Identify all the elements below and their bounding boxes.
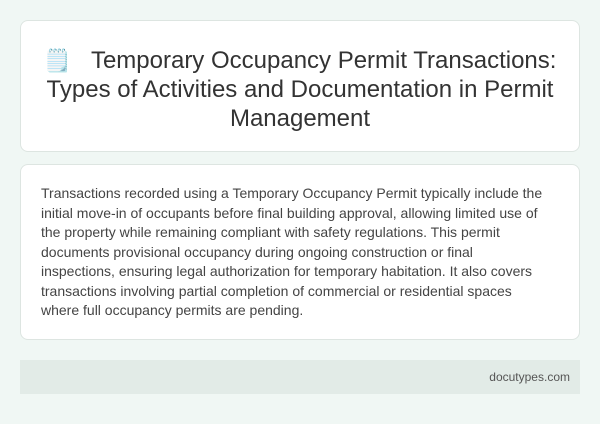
title panel — [20, 20, 580, 152]
description text: where full occupancy permits are pending. — [41, 302, 303, 318]
footer source: docutypes.com — [489, 370, 570, 384]
footer bar — [20, 360, 580, 394]
description text: inspections, ensuring legal authorization for temporary habitation. It also covers — [41, 263, 532, 279]
description panel — [20, 164, 580, 340]
description text: documents provisional occupancy during ongoing construction or final — [41, 244, 473, 260]
description text: transactions involving partial completion of commercial or residential spaces — [41, 282, 512, 298]
title: 🗒️ Temporary Occupancy Permit Transactions: Types of Activities and Documentation in Permit Management — [44, 47, 556, 132]
description text — [41, 185, 542, 318]
description text: the property while remaining compliant with safety regulations. This permit — [41, 224, 500, 240]
description text: initial move-in of occupants before final building approval, allowing limited use of — [41, 204, 538, 220]
description text: Transactions recorded using a Temporary Occupancy Permit typically include the — [41, 185, 542, 201]
